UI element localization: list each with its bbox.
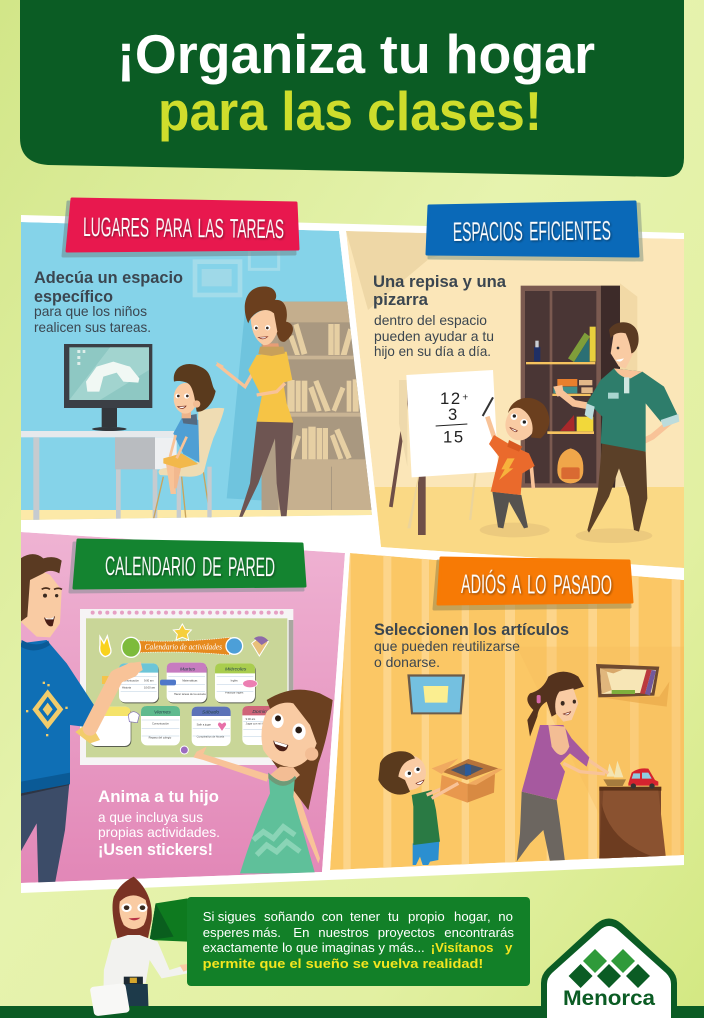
callout text xyxy=(203,909,514,971)
scene: father and son with board: 3 xyxy=(448,405,457,424)
callout text: con xyxy=(322,909,343,924)
box xyxy=(442,759,498,780)
text: anima a tu hijo: ¡Usen stickers! xyxy=(98,840,213,859)
text: anima a tu hijo xyxy=(98,787,220,859)
footer bar xyxy=(0,1006,704,1018)
scene: father and son with board xyxy=(389,283,679,543)
boat xyxy=(603,779,626,786)
text: seleccionen los artículos: o donarse. xyxy=(374,654,440,670)
calendar cards: Miércoles xyxy=(225,666,247,672)
text: anima a tu hijo: propias actividades. xyxy=(98,824,220,840)
calendar cards: Viernes xyxy=(154,710,171,716)
text: una repisa y una pizarra: hijo en su día a día. xyxy=(374,343,491,359)
callout text: encontrarás xyxy=(444,925,514,940)
text: una repisa y una pizarra: pueden ayudar a tu xyxy=(374,328,494,344)
cabinet xyxy=(599,787,661,860)
scene: wall calendar, father and daughter xyxy=(21,554,333,883)
calendar cards: Sábado xyxy=(202,710,219,716)
toy car xyxy=(628,768,658,786)
calendar cards: Matemáticas xyxy=(182,679,198,683)
callout text: esperes xyxy=(203,925,250,940)
callout text: más. xyxy=(252,925,281,940)
mother xyxy=(517,792,565,862)
panel: espacios eficientes xyxy=(346,202,684,568)
scene: father and son with board: 15 xyxy=(443,427,465,446)
callout text: permite que el sueño se vuelva realidad! xyxy=(203,956,483,971)
callout text: proyectos xyxy=(378,925,435,940)
desk xyxy=(21,431,174,437)
calendar cards: Jugar con mi familia xyxy=(246,722,270,726)
calendar cards: Hacer tareas de la escuela xyxy=(174,692,206,696)
callout text: sigues xyxy=(218,909,256,924)
panel: adiós a lo pasado xyxy=(330,550,684,870)
monitor xyxy=(102,407,117,427)
text: una repisa y una pizarra xyxy=(373,272,507,359)
calendar cards: 9:00 am xyxy=(144,679,154,683)
wall calendar xyxy=(80,609,293,765)
calendar cards xyxy=(90,663,282,754)
calendar cards: Domingo xyxy=(252,709,273,715)
calendar cards: Comunicación xyxy=(122,679,139,683)
text: adecúa un espacio: para que los niños xyxy=(34,303,147,319)
wall calendar: Calendario de actividades xyxy=(145,642,222,651)
wall shelf xyxy=(597,682,669,707)
calendar cards: Repaso del colegio xyxy=(149,735,172,739)
label: lugares para las tareas xyxy=(63,199,298,256)
title: para las clases! xyxy=(158,80,542,142)
scene: father and son with board: + xyxy=(462,393,468,404)
boy xyxy=(166,464,176,494)
callout text: Si xyxy=(203,909,214,924)
mother xyxy=(124,522,297,526)
callout text: En xyxy=(293,925,309,940)
text: una repisa y una pizarra: dentro del espacio xyxy=(374,312,487,328)
son xyxy=(413,840,439,865)
callout text: nuestros xyxy=(318,925,369,940)
text: una repisa y una pizarra: pizarra xyxy=(373,290,429,309)
label: espacios eficientes xyxy=(427,202,642,260)
calendar cards: Cumpleaños de Abuela xyxy=(197,735,225,739)
title: ¡Organiza tu hogar xyxy=(117,23,595,85)
calendar cards: Salir a jugar xyxy=(197,723,211,727)
scene: mother and son at desk xyxy=(21,250,372,526)
scene: father and son with board: 12 xyxy=(440,389,462,408)
calendar cards: Historia xyxy=(122,686,132,690)
label: calendario de pared xyxy=(70,540,305,592)
text: seleccionen los artículos xyxy=(374,620,569,670)
callout text: y xyxy=(505,940,513,955)
father xyxy=(587,440,647,533)
calendar cards: 9:00 am xyxy=(246,717,256,721)
logo: Menorca xyxy=(541,918,677,1018)
text: anima a tu hijo: a que incluya sus xyxy=(98,809,203,825)
white photo frame xyxy=(21,215,684,893)
text: adecúa un espacio: realicen sus tareas. xyxy=(34,319,151,335)
callout text: tu xyxy=(388,909,399,924)
father xyxy=(21,783,69,883)
text: adecúa un espacio: Adecúa un espacio xyxy=(34,268,183,287)
calendar cards: Inglés xyxy=(231,679,238,683)
callout text: exactamente lo que imaginas y más... xyxy=(203,940,425,955)
chair xyxy=(153,472,211,520)
callout text: hogar, xyxy=(454,909,491,924)
callout text: propio xyxy=(408,909,445,924)
title xyxy=(117,23,595,142)
calendar cards: Practicar Inglés xyxy=(225,690,244,694)
wall picture xyxy=(407,674,465,714)
whiteboard xyxy=(389,390,410,507)
text: adecúa un espacio xyxy=(34,268,183,335)
scene: mother and son sorting objects xyxy=(343,550,684,870)
advisor with speech tail xyxy=(90,877,195,1016)
callout xyxy=(187,897,530,986)
label: calendario de pared: CALENDARIO DE PARED xyxy=(105,551,275,582)
text: seleccionen los artículos: Seleccionen los artículos xyxy=(374,620,569,639)
text: anima a tu hijo: Anima a tu hijo xyxy=(98,787,219,806)
boy xyxy=(480,523,550,537)
callout text: tener xyxy=(350,909,381,924)
text: seleccionen los artículos: que pueden reutilizarse xyxy=(374,638,520,654)
daughter xyxy=(193,747,270,782)
callout text: ¡Visítanos xyxy=(431,940,493,955)
label: lugares para las tareas: LUGARES PARA LAS TAREAS xyxy=(83,212,284,244)
header banner xyxy=(20,0,684,177)
logo: Menorca: Menorca xyxy=(563,987,655,1010)
callout text: soñando xyxy=(264,909,315,924)
text: adecúa un espacio: específico xyxy=(34,287,113,306)
callout text: no xyxy=(498,909,513,924)
calendar cards: Comunicación xyxy=(152,722,169,726)
panel: lugares para las tareas xyxy=(21,199,381,526)
panel: calendario de pared xyxy=(21,532,345,883)
calendar cards: 10:00 am xyxy=(144,686,156,690)
label: adiós a lo pasado xyxy=(434,558,632,609)
text: una repisa y una pizarra: Una repisa y una xyxy=(373,272,507,291)
calendar cards: Martes xyxy=(180,666,196,672)
